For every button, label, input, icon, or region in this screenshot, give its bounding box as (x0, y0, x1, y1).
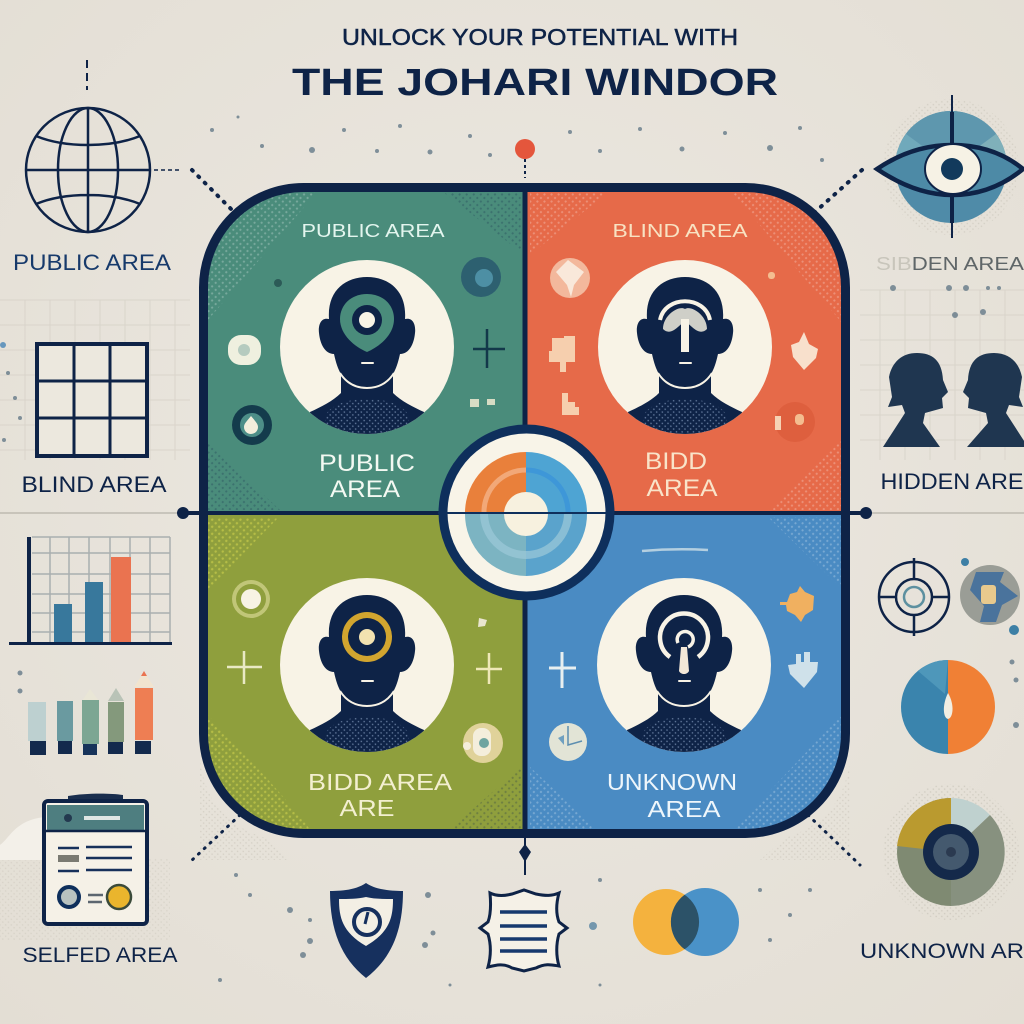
title line two: THE JOHARI WINDOR (292, 62, 778, 104)
label (308, 769, 453, 821)
icon: orange blob (780, 586, 814, 622)
label: BIDD AREA (308, 769, 453, 795)
icon: badge (228, 335, 261, 365)
label (319, 450, 415, 503)
left icon: globe (26, 108, 150, 232)
left chart: bars (9, 537, 172, 645)
right chart: pie (901, 660, 995, 754)
bottom icon: shield (330, 883, 403, 978)
background halftone (0, 760, 850, 940)
right label: unknown area: UNKNOWN AR (860, 940, 1024, 963)
icon: plus left (227, 651, 262, 684)
icon: orange disc (775, 402, 815, 442)
icon: plus (549, 652, 576, 688)
icon: shape left two (549, 336, 575, 372)
right label: hidden area: HIDDEN ARE (880, 469, 1024, 494)
bottom icon: note (480, 890, 567, 971)
panel: public area (228, 221, 505, 503)
right icon: two silhouettes (883, 353, 1024, 447)
portrait (280, 578, 454, 757)
label: UNKNOWN (607, 769, 737, 795)
left label: blind area: BLIND AREA (22, 472, 167, 497)
quadrant: public (199, 183, 525, 512)
background faint grids (0, 290, 1024, 460)
label: AREA (648, 796, 721, 822)
bottom icon: venn (633, 888, 739, 956)
portrait (597, 578, 771, 757)
portrait (598, 260, 772, 439)
central hub (438, 424, 614, 600)
title line one: UNLOCK YOUR POTENTIAL WITH (342, 24, 738, 50)
icon: badge (232, 580, 270, 618)
corner halftones (204, 192, 317, 320)
panel: unknown area (549, 549, 818, 822)
title (292, 24, 778, 104)
portrait (280, 260, 454, 439)
icon: shape left three (562, 393, 579, 415)
icon: droplet (232, 405, 272, 445)
icon: arrow shape (788, 652, 818, 688)
left icon: window grid (37, 344, 147, 456)
label: ARE (340, 795, 394, 821)
right faded label: SIB DEN AREA (876, 254, 1024, 274)
right chart: donut (883, 784, 1019, 920)
connectors and dotted lines (0, 60, 1024, 875)
right icon: eye (877, 95, 1023, 238)
left icon: document (44, 794, 147, 924)
heading: BLIND AREA (612, 221, 748, 241)
right icon: target (878, 558, 950, 636)
left label: public area: PUBLIC AREA (13, 250, 171, 275)
icon: ring (463, 723, 503, 763)
label: BIDD (645, 448, 707, 475)
hub: ring chart (465, 452, 587, 576)
label (645, 448, 718, 502)
right icon: abstract disc (960, 558, 1020, 635)
icon: small marks (470, 399, 495, 407)
icon: shape left (550, 258, 590, 298)
label: AREA (646, 475, 718, 502)
left icon: cloud (0, 817, 45, 860)
panel: bidd area (227, 578, 503, 821)
panel: blind area (549, 221, 818, 502)
window frame and quadrants (177, 183, 872, 862)
faint streak (642, 549, 708, 551)
icon: plus right (476, 653, 502, 684)
label: PUBLIC (319, 450, 415, 477)
quadrant: olive (199, 512, 525, 838)
icon: right shapes (791, 332, 818, 370)
quadrant: blind (525, 183, 850, 512)
left label: selfed area: SELFED AREA (22, 944, 178, 967)
label (607, 769, 737, 822)
icon: disc (549, 723, 587, 761)
red marker (515, 139, 535, 178)
label: AREA (330, 476, 400, 503)
icon: dark disc (461, 257, 501, 297)
icon: cross (473, 329, 505, 368)
quadrant: unknown (525, 512, 850, 838)
heading: PUBLIC AREA (302, 221, 444, 241)
left chart: pencils (28, 671, 154, 755)
